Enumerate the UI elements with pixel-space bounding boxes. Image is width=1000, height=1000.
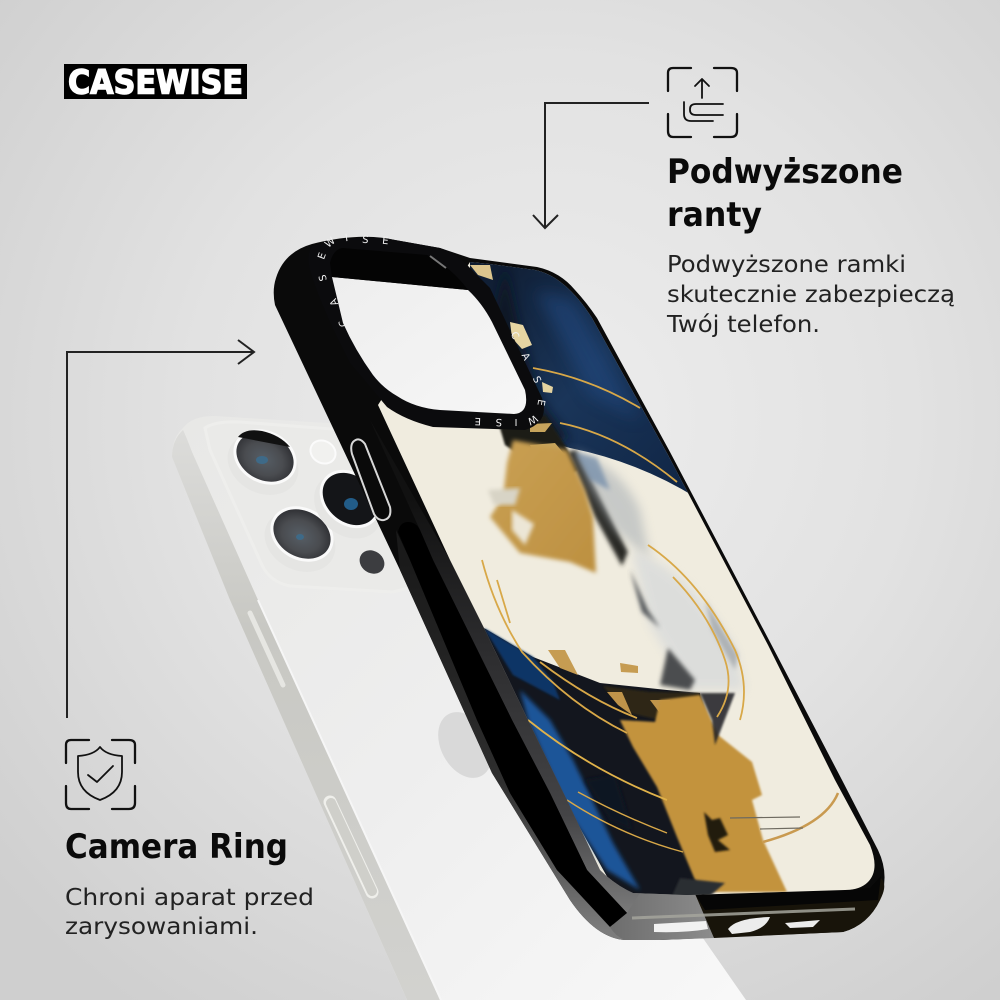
text: raised edges description: skutecznie zabezpieczą [667, 282, 955, 308]
ring lettering: I [344, 233, 349, 244]
black brush strip [567, 450, 628, 566]
ring lettering: A [519, 351, 532, 363]
arrow: raised edges [533, 103, 649, 228]
gold paint lines [482, 368, 838, 852]
apple logo [427, 703, 503, 787]
ring lettering: S [362, 235, 369, 246]
cream base [370, 250, 890, 900]
case bottom edge: dark [695, 878, 884, 938]
ring lettering: I [515, 416, 517, 427]
case side button [351, 439, 390, 520]
ring lettering: C [508, 330, 521, 342]
bright blue stroke [520, 690, 640, 890]
printed artwork [370, 250, 890, 900]
ring inner wall [330, 248, 468, 290]
dark brush under ring [500, 415, 578, 480]
icon: shield [66, 740, 135, 809]
case side slot [398, 522, 627, 927]
camera bump [205, 422, 420, 592]
lower navy paint [484, 628, 700, 900]
lens right [301, 458, 395, 552]
ring lettering: E [382, 236, 389, 247]
case body [274, 237, 885, 940]
camera opening [332, 277, 526, 414]
lens bottom [254, 496, 346, 584]
charging port cutouts [654, 921, 708, 932]
grey splash [572, 450, 650, 560]
top blue paint [470, 262, 688, 493]
arrow: camera ring [67, 340, 254, 718]
case bottom edge: translucent [610, 893, 714, 940]
phone side buttons [250, 613, 283, 685]
icon: raised edges [668, 68, 737, 137]
case side band [370, 420, 706, 925]
text: camera ring description [65, 885, 314, 940]
text: raised edges description [666, 252, 955, 338]
text: camera ring description: zarysowaniami. [65, 914, 258, 940]
ring lettering: S [317, 273, 330, 282]
ring lettering: S [530, 375, 543, 385]
camera ring [308, 233, 546, 430]
gold blocks [548, 650, 578, 675]
lens top [217, 419, 309, 507]
phone side band [172, 430, 440, 1000]
text: raised edges description: Twój telefon. [666, 312, 820, 338]
heading: Podwyższone ranty: ranty [667, 195, 762, 234]
phone case [274, 233, 890, 940]
ring lettering: E [316, 251, 329, 261]
ring lettering: C [337, 318, 350, 328]
ring lettering: W [323, 236, 338, 250]
flash [306, 436, 340, 468]
ring lettering [316, 233, 546, 427]
centre gold [490, 440, 596, 573]
ring lettering: S [496, 416, 502, 427]
text: raised edges description: Podwyższone ramki [667, 252, 906, 278]
ring lettering: W [525, 412, 539, 426]
white phone behind the case [172, 416, 746, 1000]
logo: CASEWISE [68, 62, 243, 102]
heading: Podwyższone ranty [667, 152, 903, 234]
text: camera ring description: Chroni aparat przed [65, 885, 314, 911]
top gold flakes [470, 265, 493, 280]
dark gold patch [604, 686, 705, 719]
bottom gold [620, 695, 787, 892]
microphone [355, 546, 389, 578]
heading: Podwyższone ranty: Podwyższone [667, 152, 903, 191]
ring lettering: A [328, 297, 341, 307]
ring lettering: E [475, 415, 481, 426]
heading: Camera Ring: Camera Ring [65, 827, 288, 866]
ring lettering: E [534, 398, 546, 407]
case outer edge [396, 530, 660, 940]
